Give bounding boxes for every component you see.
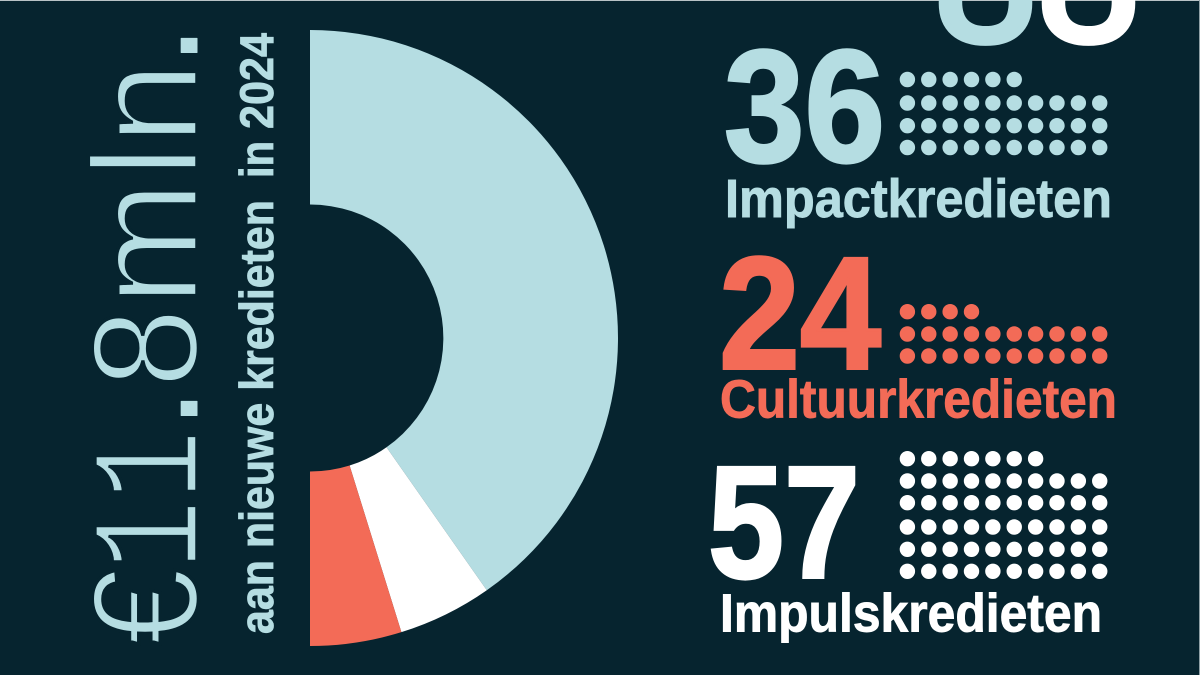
group: Cultuurkredieten — [719, 224, 1117, 430]
heading: total amount, rotated: m — [61, 181, 229, 306]
number: 36: 36 — [724, 16, 885, 196]
dot grid: 24 — [907, 312, 1101, 356]
heading: total amount, rotated: . — [64, 25, 229, 66]
segment: Impactkredieten — [310, 30, 618, 590]
dot grid: 36 — [907, 80, 1101, 148]
label: Impactkredieten: Impactkredieten — [725, 169, 1112, 229]
heading: total amount, rotated: 1 — [69, 500, 245, 570]
label: Cultuurkredieten: Cultuurkredieten — [720, 370, 1117, 430]
donut chart — [310, 30, 618, 646]
heading: total amount, rotated — [61, 25, 245, 645]
heading: total amount, rotated: € — [62, 568, 229, 645]
group: Impulskredieten — [708, 432, 1102, 644]
subheading: aan nieuwe kredieten in 2024: in — [230, 141, 283, 178]
heading: total amount, rotated: 8 — [62, 308, 230, 388]
subheading: aan nieuwe kredieten in 2024: 2024 — [230, 33, 283, 129]
dot grid: 57 — [907, 459, 1101, 571]
group: Impactkredieten — [724, 16, 1112, 229]
segment: Impulskredieten — [350, 447, 487, 632]
heading: total amount, rotated: l — [61, 145, 229, 178]
number: 57: 57 — [708, 432, 860, 612]
heading: total amount, rotated: . — [64, 388, 229, 429]
number: 24: 24 — [719, 224, 881, 402]
heading: total amount, rotated: n — [61, 62, 229, 145]
segment: Cultuurkredieten — [310, 466, 401, 646]
cropped total number at top edge — [934, 0, 1140, 82]
label: Impulskredieten: Impulskredieten — [720, 584, 1102, 644]
subheading: aan nieuwe kredieten in 2024: aan nieuwe kredieten — [230, 200, 283, 634]
heading: total amount, rotated: 1 — [69, 430, 245, 500]
